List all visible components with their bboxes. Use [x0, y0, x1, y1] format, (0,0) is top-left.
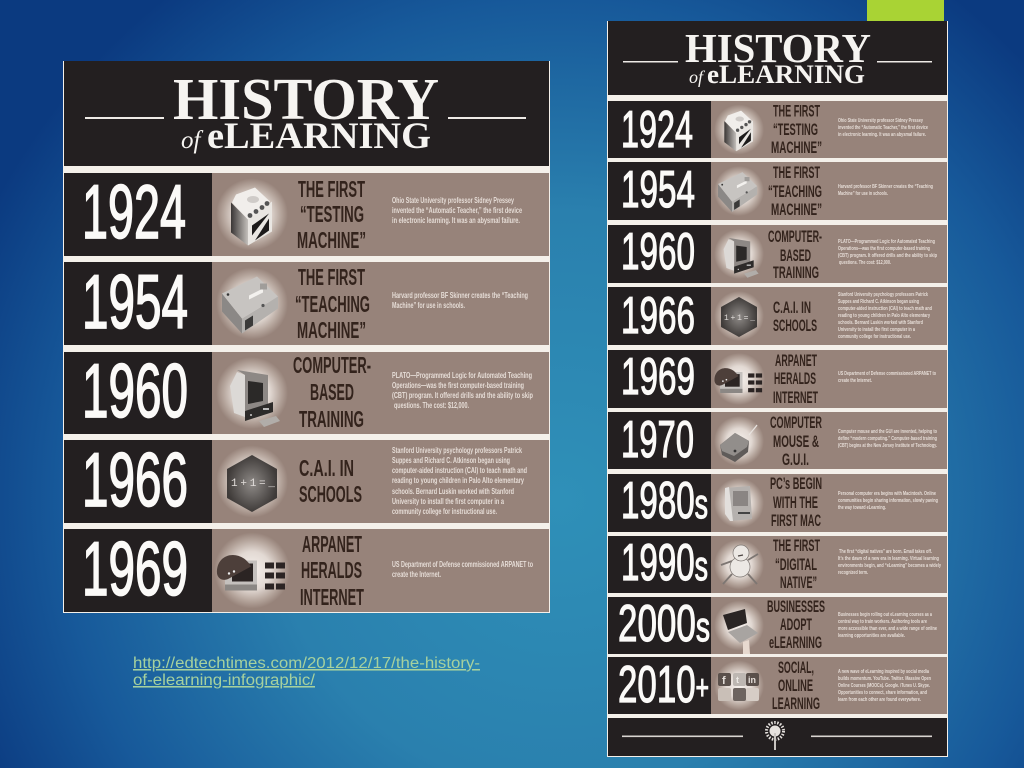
- row 1990s: 1990s: [621, 534, 708, 592]
- row 1924: “TESTING: [773, 121, 818, 139]
- row 2010+: Online Courses (MOOCs). Google. iTunes U. Skype.: [838, 683, 930, 689]
- row 1924: THE FIRST: [298, 176, 365, 202]
- row 1954: 1954: [621, 161, 695, 219]
- left header: HISTORY: [173, 66, 439, 132]
- row 1966: community college for instructional use.: [838, 334, 911, 340]
- row 1969: 1969: [621, 348, 695, 406]
- row 2010+: A new wave of eLearning inspired by social media: [838, 669, 930, 675]
- row 2010+: 2010: [618, 656, 734, 714]
- row 2000s: BUSINESSES: [767, 598, 825, 616]
- row 1970: (CBT) begins at the New Jersey Institute of Technology.: [838, 443, 937, 449]
- row 1954: [64, 260, 549, 345]
- row 1969: INTERNET: [773, 389, 818, 407]
- row 1954: MACHINE”: [297, 317, 366, 343]
- row 1966: C.A.I. IN: [299, 455, 354, 481]
- icon: mouse: [720, 425, 757, 462]
- row 1969: US Department of Defense commissioned ARPANET to: [838, 371, 936, 377]
- row 1960: Operations—was the first computer-based training: [392, 381, 524, 390]
- row 2010+: SOCIAL,: [778, 659, 814, 677]
- row 1960: (CBT) program. It offered drills and the ability to skip: [392, 391, 533, 400]
- row 1980s: PC’s BEGIN: [770, 475, 822, 493]
- row 1960: Operations—was the first computer-based training: [838, 246, 930, 252]
- row 1954: THE FIRST: [773, 164, 820, 182]
- row 1980s: the way toward eLearning.: [838, 505, 886, 511]
- row 1966: 1966: [621, 287, 695, 345]
- row 1924: 1924: [621, 101, 693, 159]
- row 2000s: eLEARNING: [769, 634, 822, 652]
- panel: right infographic: [607, 21, 948, 757]
- panel: left infographic: [63, 61, 550, 613]
- row 1970: COMPUTER: [770, 414, 822, 432]
- row 1990s: The first “digital natives” are born. Email takes off.: [839, 549, 932, 555]
- row 1924: Ohio State University professor Sidney Pressey: [392, 196, 514, 205]
- row 1990s: THE FIRST: [773, 537, 820, 555]
- row 1954: “TEACHING: [768, 183, 822, 201]
- row 1990s: [608, 534, 947, 593]
- row 1960: questions. The cost: $12,000.: [394, 401, 469, 410]
- row 1969: [608, 348, 947, 408]
- right header: [608, 21, 947, 95]
- row 1980s: FIRST MAC: [771, 512, 821, 530]
- row 1924: “TESTING: [300, 201, 364, 227]
- right header: eLEARNING: [707, 60, 865, 89]
- icon: social media: in: [748, 675, 756, 685]
- row 1924: MACHINE”: [297, 227, 366, 253]
- row 2010+: LEARNING: [772, 695, 820, 713]
- row 1980s: Personal computer era begins with Macintosh. Online: [838, 491, 936, 497]
- source link: [133, 655, 480, 689]
- row 1924: [64, 170, 549, 256]
- row 1960: (CBT) program. It offered drills and the ability to skip: [838, 253, 937, 259]
- row 1966: computer-aided instruction (CAI) to teach math and: [392, 466, 527, 475]
- row 2000s: more accessible than ever, and a wide range of online: [838, 626, 937, 632]
- row 2010+: builds momentum. YouTube. Twitter. Massive Open: [838, 676, 931, 682]
- row 1980s: communities begin sharing information, slowly paving: [838, 498, 938, 504]
- row 2010+: learn from each other are found everywhere.: [838, 697, 921, 703]
- row 1969: ARPANET: [775, 352, 817, 370]
- row 1970: G.U.I.: [782, 451, 809, 469]
- row 2010+: ONLINE: [778, 677, 813, 695]
- row 1966: 1+1=_: [724, 314, 755, 323]
- row 1990s: environments begin, and “eLearning” becomes a widely: [838, 563, 942, 569]
- row 1966: Stanford University psychology professors Patrick: [838, 292, 929, 298]
- row 1960: [608, 223, 947, 283]
- left header: eLEARNING: [207, 116, 431, 157]
- row 1924: in electronic learning. It was an abysmal failure.: [392, 216, 520, 225]
- source link: http://edtechtimes.com/2012/12/17/the-history-: [133, 655, 480, 672]
- right header: of: [689, 67, 706, 87]
- row 1960: 1960: [621, 223, 695, 281]
- row 1970: define “modern computing.” Computer-based training: [838, 436, 937, 442]
- row 1970: 1970: [621, 411, 694, 469]
- row 2010+: +: [696, 669, 709, 707]
- row 1924: 1924: [82, 170, 186, 255]
- row 1960: BASED: [780, 247, 811, 265]
- row 1924: [608, 101, 947, 159]
- footer with tree: [608, 718, 947, 756]
- row 1966: community college for instructional use.: [392, 507, 497, 516]
- row 1966: schools. Bernard Luskin worked with Stanford: [392, 487, 514, 496]
- icon: macintosh: [725, 486, 752, 521]
- left header: [64, 61, 549, 166]
- green accent tab: [867, 0, 944, 21]
- icon: social media: f: [722, 675, 726, 687]
- row 1969: create the Internet.: [838, 378, 872, 384]
- row 1954: Harvard professor BF Skinner creates the “Teaching: [392, 291, 528, 300]
- row 1969: HERALDS: [774, 370, 816, 388]
- row 1960: BASED: [310, 379, 354, 405]
- row 1960: TRAINING: [299, 406, 364, 432]
- row 1924: THE FIRST: [773, 102, 820, 120]
- row 1924: in electronic learning. It was an abysmal failure.: [838, 132, 926, 138]
- row 2010+: [608, 656, 947, 714]
- row 1966: 1+1=_: [231, 478, 275, 490]
- row 1966: reading to young children in Palo Alto elementary: [392, 476, 524, 485]
- row 2000s: [608, 595, 947, 654]
- row 1954: MACHINE”: [771, 201, 822, 219]
- row 1980s: 1980s: [621, 472, 708, 530]
- row 1966: University to install the first computer in a: [392, 497, 504, 506]
- row 1969: US Department of Defense commissioned ARPANET to: [392, 560, 533, 569]
- row 1969: HERALDS: [301, 557, 362, 583]
- right header: HISTORY: [685, 25, 871, 71]
- source link: of-elearning-infographic/: [133, 672, 316, 689]
- row 1960: PLATO—Programmed Logic for Automated Teaching: [392, 371, 532, 380]
- row 2000s: central way to train workers. Authoring tools are: [838, 619, 927, 625]
- row 2000s: learning opportunities are available.: [838, 633, 905, 639]
- row 2010+: Opportunities to connect, share information, and: [838, 690, 927, 696]
- icon: laptop: [723, 609, 758, 654]
- row 1966: computer-aided instruction (CAI) to teach math and: [838, 306, 932, 312]
- row 1969: create the Internet.: [392, 570, 441, 579]
- row 1954: Machine” for use in schools.: [838, 191, 888, 197]
- row 1954: Machine” for use in schools.: [392, 301, 465, 310]
- row 1966: [64, 438, 549, 523]
- icon: baby: [721, 545, 758, 584]
- row 1924: invented the “Automatic Teacher,” the first device: [392, 206, 522, 215]
- row 1990s: recognized term.: [838, 570, 868, 576]
- row 1966: Suppes and Richard C. Atkinson began using: [838, 299, 919, 305]
- row 1966: [608, 287, 947, 345]
- row 1960: COMPUTER-: [768, 228, 822, 246]
- row 1966: University to install the first computer in a: [838, 327, 916, 333]
- row 1966: Suppes and Richard C. Atkinson began using: [392, 456, 510, 465]
- row 1990s: It’s the dawn of a new era in learning. Virtual learning: [838, 556, 939, 562]
- row 2000s: ADOPT: [780, 616, 812, 634]
- row 1969: 1969: [82, 527, 188, 612]
- row 1969: ARPANET: [302, 531, 362, 557]
- left header: of: [181, 127, 204, 154]
- row 1966: schools. Bernard Luskin worked with Stanford: [838, 320, 923, 326]
- row 1954: “TEACHING: [295, 291, 370, 317]
- row 1924: invented the “Automatic Teacher,” the first device: [838, 125, 928, 131]
- row 1970: Computer mouse and the GUI are invented, helping to: [838, 429, 937, 435]
- row 1966: 1966: [82, 438, 188, 523]
- row 1954: Harvard professor BF Skinner creates the “Teaching: [838, 184, 933, 190]
- row 2000s: Businesses begin rolling out eLearning courses as a: [838, 612, 933, 618]
- row 1990s: “DIGITAL: [775, 556, 817, 574]
- row 1954: THE FIRST: [298, 264, 365, 290]
- row 1969: [64, 527, 549, 612]
- row 1980s: WITH THE: [773, 494, 818, 512]
- row 1960: 1960: [82, 349, 188, 434]
- row 1954: [608, 161, 947, 220]
- row 1924: Ohio State University professor Sidney Pressey: [838, 118, 924, 124]
- row 1960: COMPUTER-: [293, 352, 371, 378]
- row 1960: [64, 349, 549, 434]
- row 1966: SCHOOLS: [299, 481, 362, 507]
- row 1966: reading to young children in Palo Alto elementary: [838, 313, 931, 319]
- row 1924: MACHINE”: [771, 139, 822, 157]
- row 1966: Stanford University psychology professors Patrick: [392, 446, 522, 455]
- row 1960: PLATO—Programmed Logic for Automated Teaching: [838, 239, 935, 245]
- row 1954: 1954: [82, 260, 188, 345]
- row 2000s: 2000s: [618, 595, 710, 653]
- row 1980s: [608, 472, 947, 532]
- icon: social media: [718, 673, 759, 701]
- row 1960: questions. The cost: $12,000.: [839, 260, 891, 266]
- row 1966: C.A.I. IN: [773, 299, 811, 317]
- row 1966: SCHOOLS: [773, 317, 817, 335]
- icon: social media: t: [736, 675, 739, 685]
- row 1970: [608, 411, 947, 469]
- row 1969: INTERNET: [300, 584, 364, 610]
- row 1970: MOUSE &: [773, 433, 819, 451]
- row 1960: TRAINING: [773, 264, 819, 282]
- row 1990s: NATIVE”: [780, 574, 817, 592]
